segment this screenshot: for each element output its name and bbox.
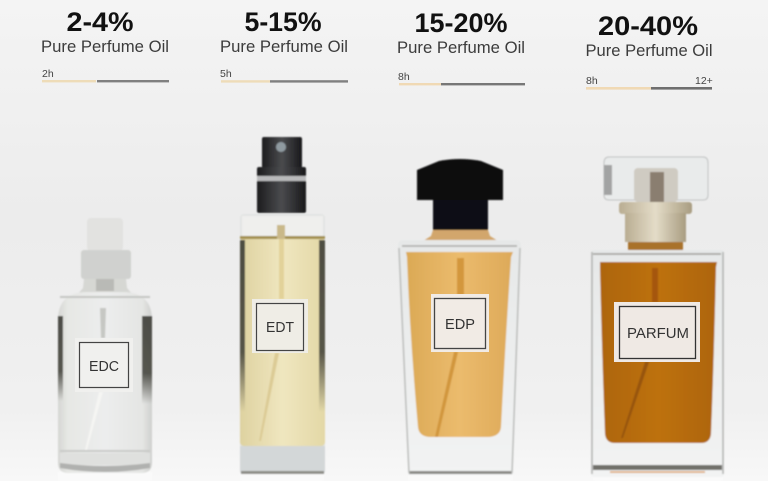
subtitle: Pure Perfume Oil	[586, 42, 712, 60]
label: PARFUM	[627, 325, 689, 342]
percentage 2-4%: 2-4%	[66, 7, 134, 37]
duration bar	[221, 80, 348, 83]
label: EDC	[89, 358, 119, 375]
percentage 15-20%: 15-20%	[414, 8, 508, 38]
duration bar	[586, 87, 712, 90]
duration label: 2h	[42, 68, 54, 80]
subtitle: Pure Perfume Oil	[397, 39, 525, 57]
label	[252, 299, 308, 353]
duration bar	[399, 83, 525, 85]
percentage 5-15%: 5-15%	[244, 7, 322, 37]
percentage 20-40%: 20-40%	[598, 11, 698, 41]
header: Parfum concentration	[586, 11, 713, 90]
duration label end: 12+	[695, 75, 713, 87]
subtitle: Pure Perfume Oil	[41, 38, 169, 56]
label	[614, 302, 700, 362]
duration label: 5h	[220, 68, 232, 80]
label	[75, 338, 133, 392]
label: EDT	[266, 319, 294, 336]
header: EDP concentration	[397, 8, 525, 85]
subtitle: Pure Perfume Oil	[220, 38, 348, 56]
label	[431, 294, 489, 352]
duration label start: 8h	[586, 75, 598, 87]
duration label: 8h	[398, 71, 410, 83]
header: EDC concentration	[41, 7, 169, 82]
bottle: PARFUM	[591, 157, 724, 481]
duration bar	[42, 80, 169, 82]
bottle: EDP	[398, 159, 521, 481]
bottle: EDT	[240, 137, 325, 481]
bottle: EDC	[58, 218, 152, 481]
header: EDT concentration	[220, 7, 348, 83]
label: EDP	[445, 316, 475, 333]
